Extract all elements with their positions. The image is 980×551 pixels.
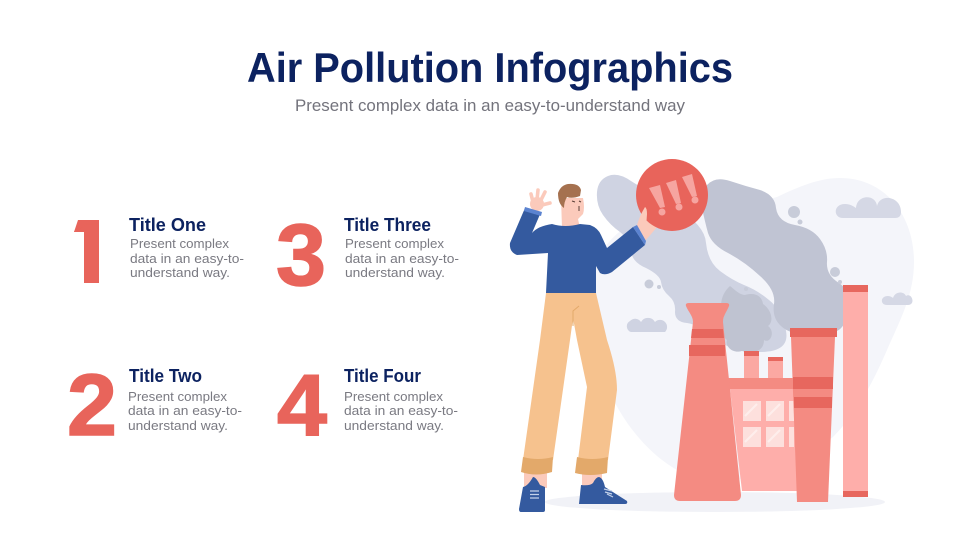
number 2: 2 [67,357,117,454]
ankles [524,470,547,488]
cloud right small [882,292,912,305]
text: item 1 description [130,236,244,280]
number 1: 1 [65,206,113,303]
right hand thumb [636,207,647,228]
text: item 3 description: understand way. [345,265,445,280]
text: item 4 description: understand way. [344,418,444,433]
smoke light [597,175,786,352]
number 3: 3 [276,207,326,304]
left chimney [674,303,741,501]
illustration: factory scene [510,159,914,512]
item 2 [67,357,242,454]
heading: Title Four: Title Four [344,366,421,386]
heading: Title One: Title One [129,215,206,235]
person [510,159,708,512]
face features [572,201,581,211]
text: item 3 description [345,236,459,280]
left hand [530,190,550,211]
text: item 4 description: data in an easy-to- [344,403,458,418]
factory building [728,351,800,491]
smoke dots [644,206,842,291]
small chimneys [744,351,759,379]
smoke dark [702,179,850,335]
trousers [523,293,617,460]
warning circle [636,159,708,231]
text: item 4 description: Present complex [344,389,444,404]
hair [558,184,581,208]
text: item 3 description: Present complex [345,236,445,251]
text: item 1 description: Present complex [130,236,230,251]
ground shadow [545,492,885,512]
shoes [519,477,545,512]
trouser cuffs [521,457,553,474]
right chimney [843,285,868,497]
item 1 [74,218,244,283]
text: item 1 description: data in an easy-to- [130,251,244,266]
text: item 4 description [344,389,458,433]
heading: Title Two: Title Two [129,366,202,386]
item 4 [277,357,458,454]
sweater [510,208,645,293]
item 3 [276,207,459,304]
text: item 2 description: data in an easy-to- [128,403,242,418]
text: item 3 description: data in an easy-to- [345,251,459,266]
text: item 2 description [128,389,242,433]
neck and face [561,198,584,230]
number 4: 4 [277,357,327,454]
cloud left [627,318,667,332]
text: item 2 description: Present complex [128,389,228,404]
roof [728,378,794,389]
sleeve cuffs [524,207,542,216]
number 1 [74,220,99,283]
subtitle: Present complex data in an easy-to-understand way [295,96,685,115]
trouser crease [573,306,579,326]
wall [730,389,800,491]
exclamation marks [649,174,698,216]
text: item 1 description: understand way. [130,265,230,280]
cloud top right [836,197,901,218]
text: item 2 description: understand way. [128,418,228,433]
right hand [637,207,658,241]
shoe laces [530,489,613,498]
middle chimney [790,328,837,502]
smoke puff [721,286,772,352]
background blob [590,178,914,480]
title: Air Pollution Infographics [247,44,733,91]
heading: Title Three: Title Three [344,215,431,235]
windows [743,401,794,447]
